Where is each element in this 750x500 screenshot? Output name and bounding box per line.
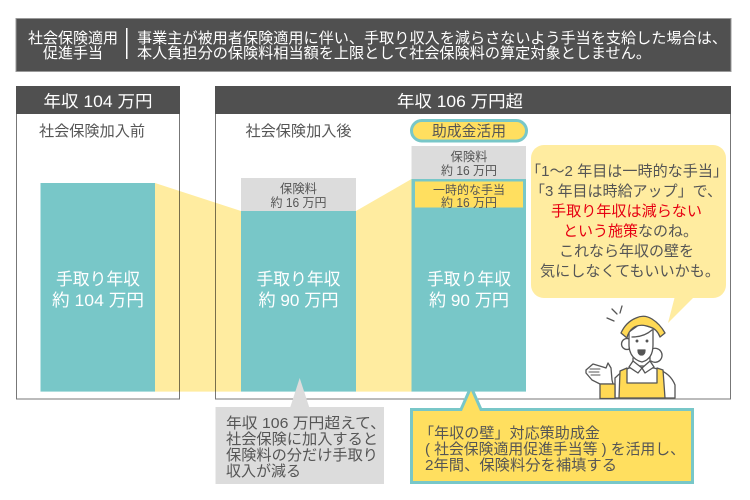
banner: definition of social insurance allowance: 社会保険適用 <box>28 30 118 47</box>
badge: subsidy used <box>412 120 526 141</box>
bar: with subsidy: 約 16 万円 <box>441 195 497 210</box>
callout: yellow subsidy note: 「年収の壁」対応策助成金 <box>419 425 600 442</box>
speech bubble: 気にしなくてもいいかも。 <box>540 263 720 280</box>
speech bubble: 手取り年収は減らない <box>551 203 702 220</box>
callout: gray note: 収入が減る <box>226 463 301 480</box>
callout: yellow subsidy note: ( 社会保険適用促進手当等 ) を活用し、 <box>425 440 685 458</box>
speech bubble: これなら年収の壁を <box>559 243 694 260</box>
speech bubble <box>526 145 728 323</box>
bar: after insurance: 手取り年収 <box>256 270 340 289</box>
bar: with subsidy <box>412 146 526 392</box>
callout: gray note <box>216 378 386 484</box>
bar: before insurance: 手取り年収 <box>56 270 140 289</box>
bar: with subsidy: 約 90 万円 <box>429 291 509 310</box>
bar: with subsidy: 保険料 <box>450 150 488 164</box>
speech bubble: という施策なのね。 <box>563 223 698 240</box>
speech bubble: 「3 年目は時給アップ」で、 <box>530 183 722 200</box>
bar: after insurance: 保険料 <box>280 182 317 196</box>
bar: after insurance: 約 90 万円 <box>258 291 338 310</box>
banner: definition of social insurance allowance: 本人負担分の保険料相当額を上限として社会保険料の算定対象としません。 <box>137 44 651 62</box>
panel: annual income 1.04M: 年収 104 万円 <box>44 92 152 111</box>
speech bubble: 「1～2 年目は一時的な手当」 <box>526 163 728 180</box>
panel: annual income 1.04M: 社会保険加入前 <box>39 123 145 140</box>
panel: annual income over 1.06M <box>215 86 731 399</box>
banner: definition of social insurance allowance <box>16 18 731 72</box>
callout: yellow subsidy note: 2年間、保険料分を補填する <box>425 457 617 474</box>
connector bands between bars <box>155 179 412 392</box>
bar: after insurance: 約 16 万円 <box>270 195 326 210</box>
bar: with subsidy: 手取り年収 <box>427 270 511 289</box>
bar: before insurance: 約 104 万円 <box>52 291 144 310</box>
panel: annual income over 1.06M: 年収 106 万円超 <box>397 92 523 111</box>
callout: gray note: 年収 106 万円超えて、 <box>226 415 386 432</box>
bar: before insurance <box>40 183 155 392</box>
bar: after insurance <box>241 178 356 392</box>
panel: annual income 1.04M <box>16 86 180 399</box>
callout: gray note: 社会保険に加入すると <box>226 431 378 448</box>
callout: yellow subsidy note <box>412 387 692 482</box>
icon: woman in apron <box>586 306 675 398</box>
bar: with subsidy: 一時的な手当 <box>433 182 505 197</box>
badge: subsidy used: 助成金活用 <box>432 123 506 140</box>
banner: definition of social insurance allowance: 事業主が被用者保険適用に伴い、手取り収入を減らさないよう手当を支給した場合は、 <box>137 30 727 47</box>
panel: annual income over 1.06M: 社会保険加入後 <box>246 123 352 140</box>
bar: with subsidy: 約 16 万円 <box>441 163 497 178</box>
banner: definition of social insurance allowance: 促進手当 <box>43 45 103 62</box>
callout: gray note: 保険料の分だけ手取り <box>226 447 378 464</box>
